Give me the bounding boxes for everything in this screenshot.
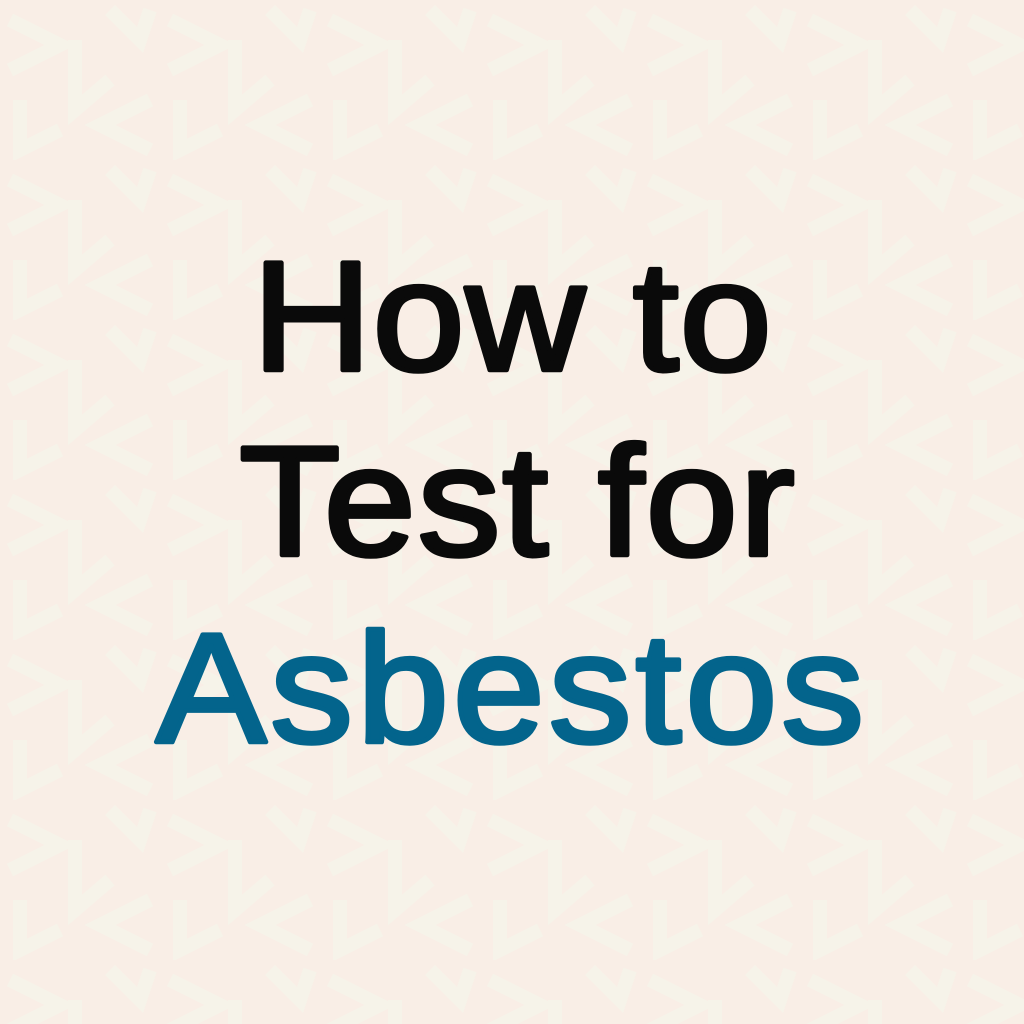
title line: Test for: Test for (239, 414, 795, 589)
title (156, 229, 864, 776)
title line: How to: How to (252, 229, 772, 404)
title line: Asbestos: Asbestos (156, 601, 864, 776)
